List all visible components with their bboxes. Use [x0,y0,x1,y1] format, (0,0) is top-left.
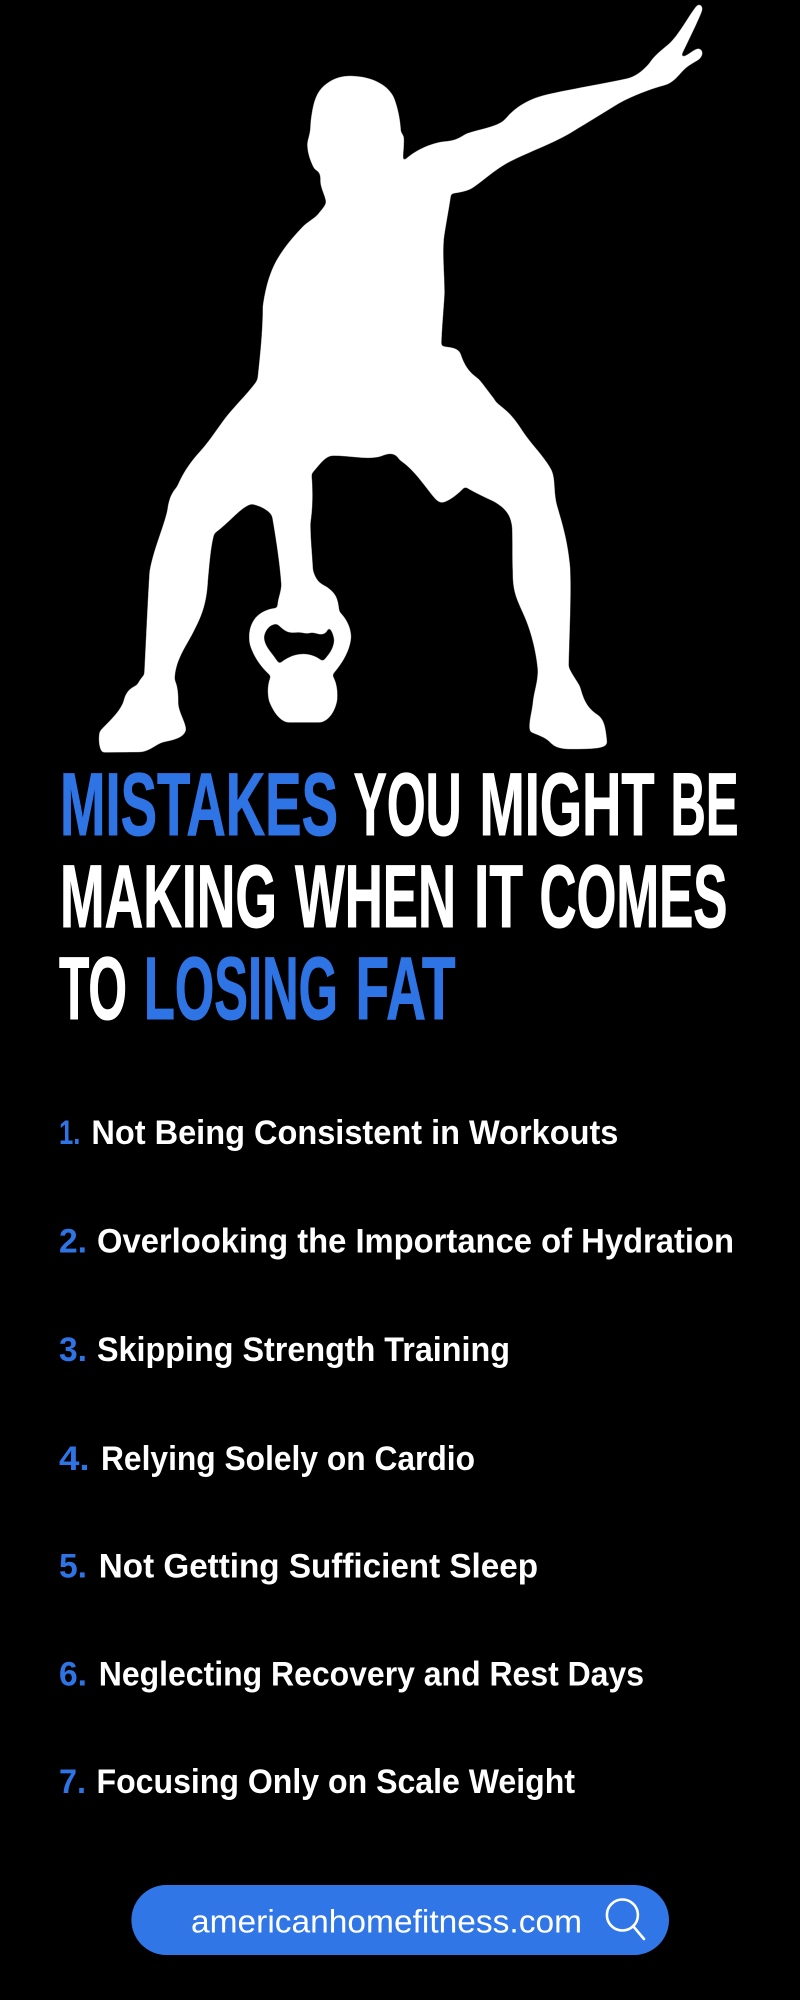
list item 2: Overlooking the Importance of Hydration [97,1222,734,1260]
list item 6: Neglecting Recovery and Rest Days [99,1656,644,1694]
title: MAKING [60,846,277,946]
website url: americanhomefitness.com [191,1904,582,1940]
title: YOU [354,754,462,854]
icon: magnifying glass [607,1900,644,1939]
list item 1: Not Being Consistent in Workouts [91,1114,618,1152]
title: TO [59,938,127,1038]
illustration: athlete silhouette lifting kettlebell [0,0,800,770]
list item 7: 7. [59,1763,86,1801]
title [59,754,738,1038]
list item 3: 3. [59,1331,87,1369]
list item 5: Not Getting Sufficient Sleep [99,1548,538,1586]
list item 7: Focusing Only on Scale Weight [96,1763,575,1801]
list item 2: 2. [59,1222,87,1260]
list item 4: 4. [59,1440,90,1478]
title: WHEN [295,846,456,946]
title: FAT [356,938,456,1038]
website search bar [131,1885,669,1955]
title: MISTAKES [60,754,338,854]
list item 4: Relying Solely on Cardio [101,1440,475,1478]
title: IT [474,846,523,946]
title: LOSING [144,938,338,1038]
title: BE [670,754,738,854]
list item 6: 6. [59,1656,87,1694]
list item 5: 5. [59,1548,87,1586]
title: MIGHT [480,754,654,854]
numbered list of mistakes [59,1114,734,1801]
list item 3: Skipping Strength Training [97,1331,510,1369]
list item 1: 1. [59,1114,80,1152]
